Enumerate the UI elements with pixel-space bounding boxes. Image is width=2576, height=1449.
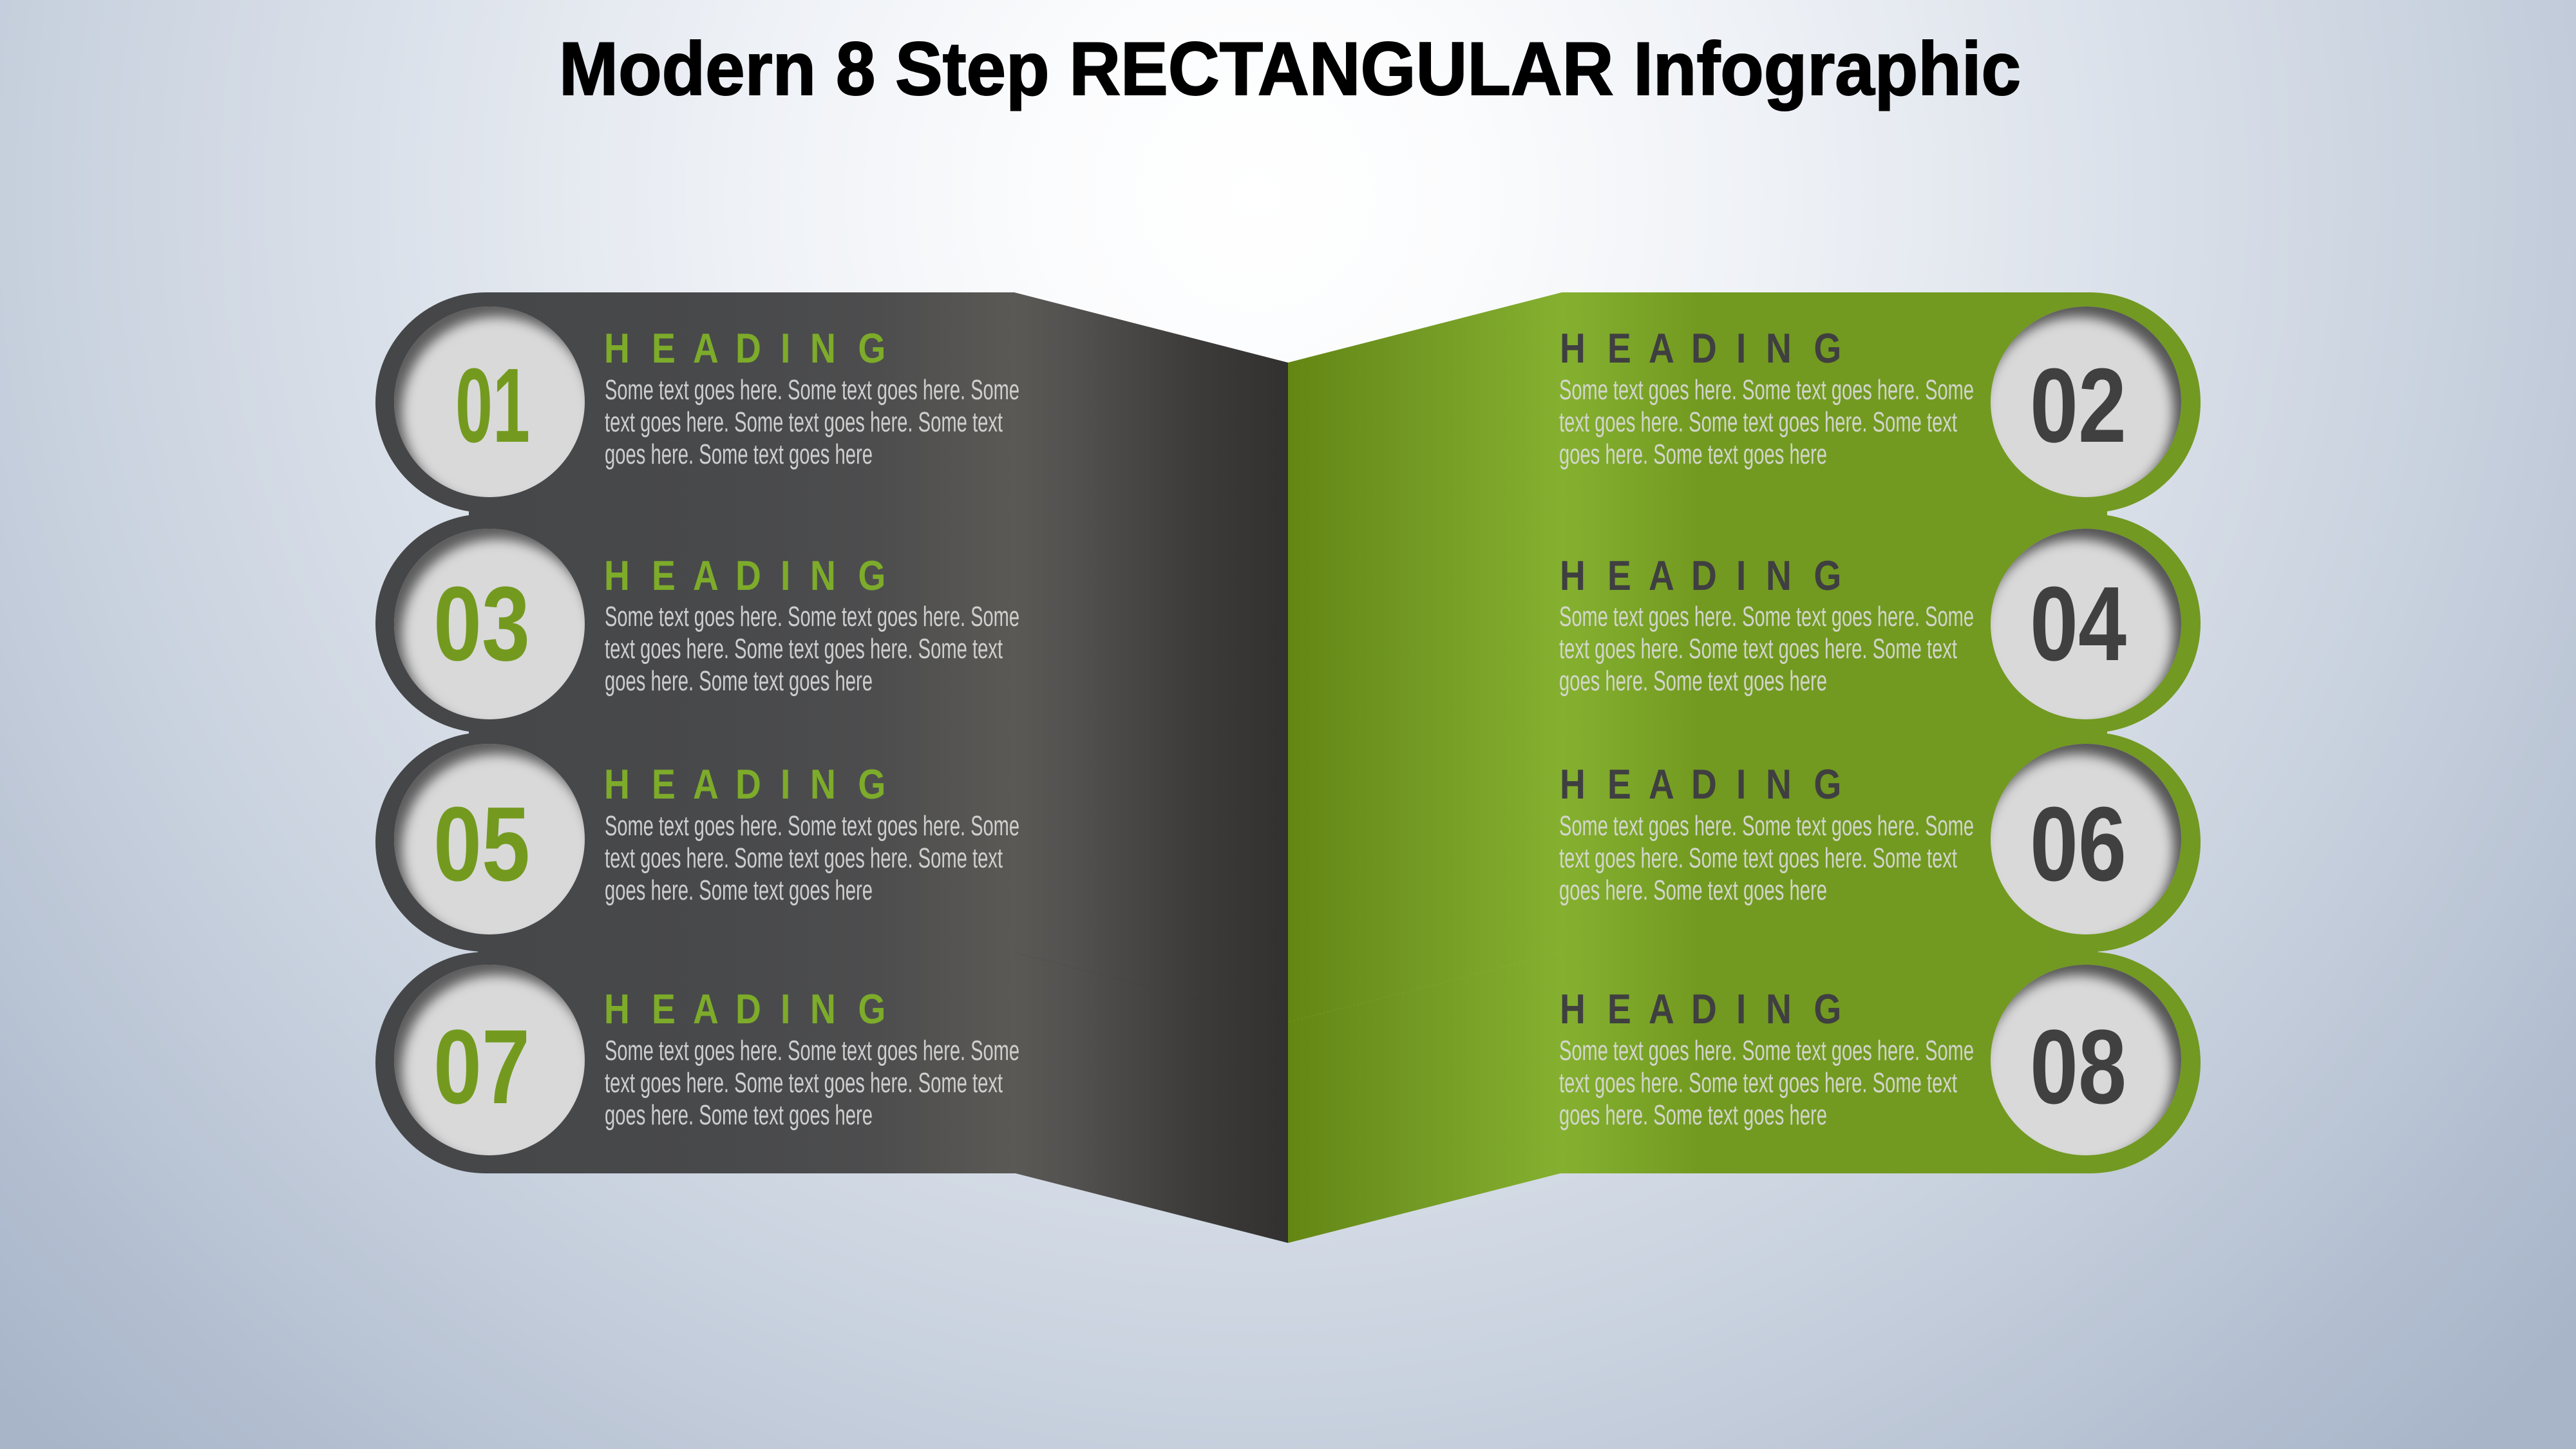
panel shape: green <box>1288 292 2201 1243</box>
number circle 04 <box>1991 529 2181 719</box>
heading 02: HEADING <box>1560 325 1841 372</box>
number 01: 01 <box>455 346 530 464</box>
heading 06: HEADING <box>1560 761 1841 808</box>
number circle 07 <box>394 965 585 1155</box>
heading 08: HEADING <box>1560 985 1841 1032</box>
number circle 03 <box>394 529 585 719</box>
panel: right green folded sheet with steps 02 04 06 08 <box>1288 292 2201 1243</box>
number 06: 06 <box>2030 785 2126 903</box>
body text 01: goes here. Some text goes here <box>605 439 873 470</box>
number 02: 02 <box>2030 346 2126 464</box>
body text 07: text goes here. Some text goes here. Some text <box>605 1068 1003 1099</box>
body text 08: Some text goes here. Some text goes here. Some <box>1559 1036 1974 1066</box>
body text 04: goes here. Some text goes here <box>1559 666 1827 697</box>
body text 04: Some text goes here. Some text goes here. Some <box>1559 601 1974 632</box>
body text 03 <box>605 601 1019 697</box>
heading 03: HEADING <box>604 552 886 599</box>
body text 05: goes here. Some text goes here <box>605 875 873 906</box>
step 01 <box>394 307 1019 497</box>
step 07 <box>394 965 1019 1155</box>
body text 06: goes here. Some text goes here <box>1559 875 1827 906</box>
body text 06: Some text goes here. Some text goes here. Some <box>1559 811 1974 842</box>
number 03: 03 <box>433 565 530 683</box>
body text 02 <box>1559 375 1974 470</box>
number circle 01 <box>394 307 585 497</box>
body text 07: Some text goes here. Some text goes here. Some <box>605 1036 1019 1066</box>
body text 05 <box>605 811 1019 906</box>
heading 04: HEADING <box>1560 552 1841 599</box>
heading 07: HEADING <box>604 985 886 1032</box>
step 05 <box>394 744 1019 934</box>
number circle 08 <box>1991 965 2181 1155</box>
body text 08: text goes here. Some text goes here. Some text <box>1559 1068 1957 1099</box>
number 08: 08 <box>2030 1008 2126 1126</box>
body text 08: goes here. Some text goes here <box>1559 1100 1827 1131</box>
number circle 06 <box>1991 744 2181 934</box>
body text 06 <box>1559 811 1974 906</box>
body text 01 <box>605 375 1019 470</box>
body text 02: text goes here. Some text goes here. Some text <box>1559 407 1957 438</box>
number 04: 04 <box>2030 565 2126 683</box>
body text 01: text goes here. Some text goes here. Some text <box>605 407 1003 438</box>
number 07: 07 <box>433 1008 530 1126</box>
body text 07 <box>605 1036 1019 1131</box>
step 03 <box>394 529 1019 719</box>
number circle 02 <box>1991 307 2181 497</box>
heading 01: HEADING <box>604 325 886 372</box>
body text 02: Some text goes here. Some text goes here. Some <box>1559 375 1974 406</box>
number circle 05 <box>394 744 585 934</box>
body text 03: Some text goes here. Some text goes here. Some <box>605 601 1019 632</box>
step 02 <box>1559 307 2181 497</box>
body text 04 <box>1559 601 1974 697</box>
body text 03: goes here. Some text goes here <box>605 666 873 697</box>
step 06 <box>1559 744 2181 934</box>
body text 05: text goes here. Some text goes here. Some text <box>605 843 1003 874</box>
panel: left dark folded sheet with steps 01 03 05 07 <box>375 292 1288 1243</box>
step 08 <box>1559 965 2181 1155</box>
body text 05: Some text goes here. Some text goes here. Some <box>605 811 1019 842</box>
body text 02: goes here. Some text goes here <box>1559 439 1827 470</box>
body text 06: text goes here. Some text goes here. Some text <box>1559 843 1957 874</box>
body text 07: goes here. Some text goes here <box>605 1100 873 1131</box>
title: Modern 8 Step RECTANGULAR Infographic <box>559 26 2021 111</box>
panel shape: dark <box>375 292 1288 1243</box>
number 05: 05 <box>433 785 530 903</box>
body text 03: text goes here. Some text goes here. Some text <box>605 634 1003 665</box>
heading 05: HEADING <box>604 761 886 808</box>
body text 01: Some text goes here. Some text goes here. Some <box>605 375 1019 406</box>
step 04 <box>1559 529 2181 719</box>
body text 04: text goes here. Some text goes here. Some text <box>1559 634 1957 665</box>
body text 08 <box>1559 1036 1974 1131</box>
